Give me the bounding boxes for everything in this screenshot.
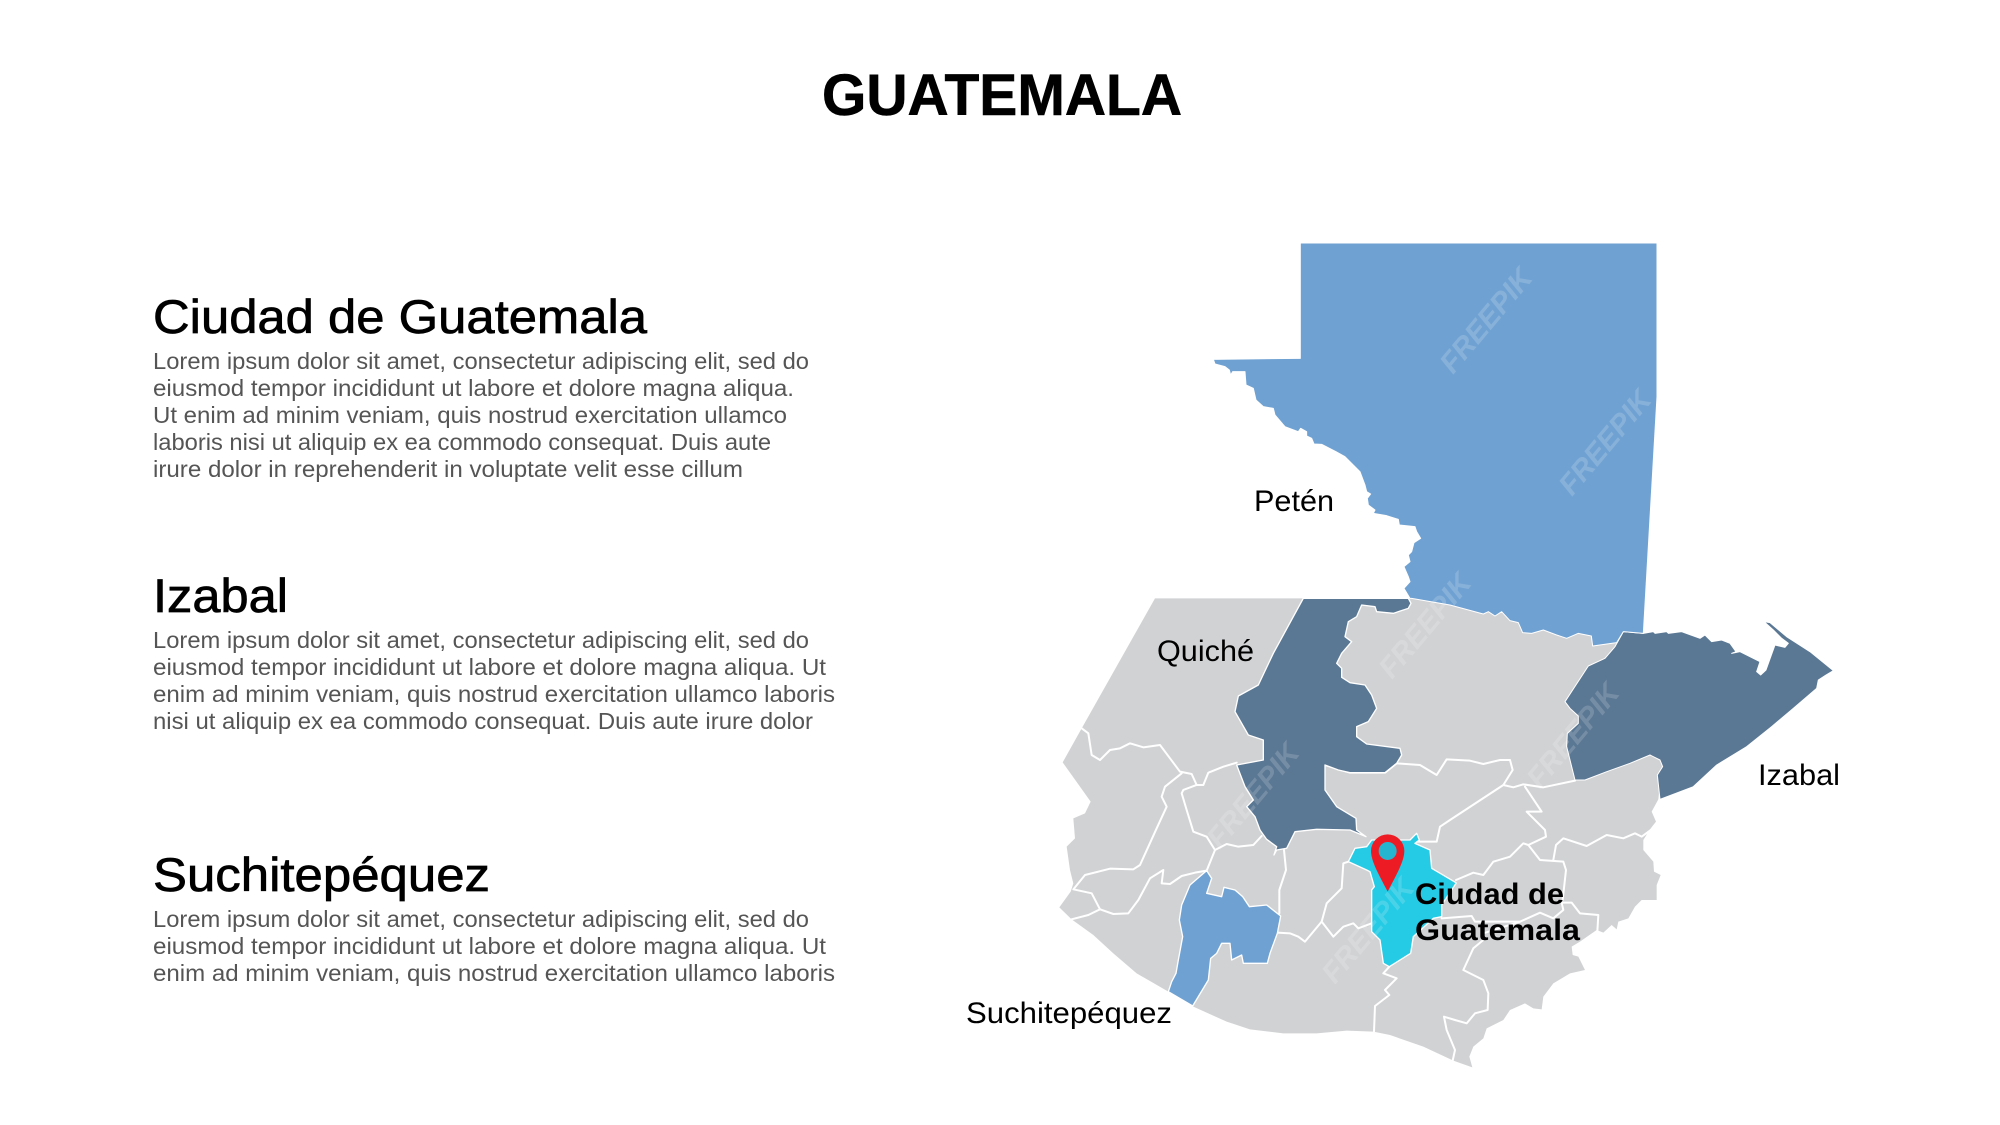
watermarks xyxy=(1201,261,1659,989)
watermarks: FREEPIK xyxy=(1373,566,1479,684)
watermarks: FREEPIK xyxy=(1434,261,1540,379)
text block: Izabal: enim ad minim veniam, quis nostrud exercitation ullamco laboris xyxy=(153,681,835,707)
region: Petén xyxy=(1213,243,1657,646)
title: GUATEMALA xyxy=(822,63,1182,128)
label: Suchitepéquez: Suchitepéquez xyxy=(966,997,1172,1030)
label: Izabal: Izabal xyxy=(1758,759,1840,792)
map of Guatemala xyxy=(1059,243,1833,1067)
region: Izabal xyxy=(1565,622,1833,799)
text block: Ciudad de Guatemala: laboris nisi ut aliquip ex ea commodo consequat. Duis aute xyxy=(153,429,771,455)
text block: Suchitepéquez: Lorem ipsum dolor sit amet, consectetur adipiscing elit, sed do xyxy=(153,906,809,932)
text block: Ciudad de Guatemala: eiusmod tempor incididunt ut labore et dolore magna aliqua. xyxy=(153,375,794,401)
label: Ciudad de Guatemala: Ciudad de xyxy=(1415,878,1564,911)
region: Ciudad de Guatemala xyxy=(1348,833,1456,967)
watermarks: FREEPIK xyxy=(1521,676,1627,794)
region: Quiché xyxy=(1235,598,1411,855)
text block: Ciudad de Guatemala: Ciudad de Guatemala xyxy=(153,290,648,343)
text block: Izabal: Lorem ipsum dolor sit amet, consectetur adipiscing elit, sed do xyxy=(153,627,809,653)
text block: Ciudad de Guatemala: Lorem ipsum dolor sit amet, consectetur adipiscing elit, sed do xyxy=(153,348,809,374)
text block: Suchitepéquez: Suchitepéquez xyxy=(153,848,490,901)
text block: Ciudad de Guatemala: irure dolor in reprehenderit in voluptate velit esse cillum xyxy=(153,456,743,482)
watermarks: FREEPIK xyxy=(1201,736,1307,854)
watermarks: FREEPIK xyxy=(1316,871,1422,989)
label: Quiché: Quiché xyxy=(1157,635,1254,668)
text block: Suchitepéquez xyxy=(153,848,835,986)
label: Ciudad de Guatemala xyxy=(1415,878,1580,947)
icon: location pin xyxy=(1371,834,1404,892)
text block: Ciudad de Guatemala: Ut enim ad minim veniam, quis nostrud exercitation ullamco xyxy=(153,402,787,428)
text block: Izabal: eiusmod tempor incididunt ut labore et dolore magna aliqua. Ut xyxy=(153,654,826,680)
department borders xyxy=(1072,728,1652,1061)
label: Petén: Petén xyxy=(1254,485,1334,518)
text block: Izabal xyxy=(153,569,835,734)
text block: Izabal: Izabal xyxy=(153,569,288,622)
label: Ciudad de Guatemala: Guatemala xyxy=(1415,914,1580,947)
watermarks: FREEPIK xyxy=(1553,383,1659,501)
text block: Ciudad de Guatemala xyxy=(153,290,809,482)
text block: Izabal: nisi ut aliquip ex ea commodo consequat. Duis aute irure dolor xyxy=(153,708,813,734)
region: Suchitepéquez xyxy=(1168,871,1281,1006)
text block: Suchitepéquez: eiusmod tempor incididunt ut labore et dolore magna aliqua. Ut xyxy=(153,933,826,959)
text block: Suchitepéquez: enim ad minim veniam, quis nostrud exercitation ullamco laboris xyxy=(153,960,835,986)
region: grey departments base xyxy=(1059,598,1663,1067)
